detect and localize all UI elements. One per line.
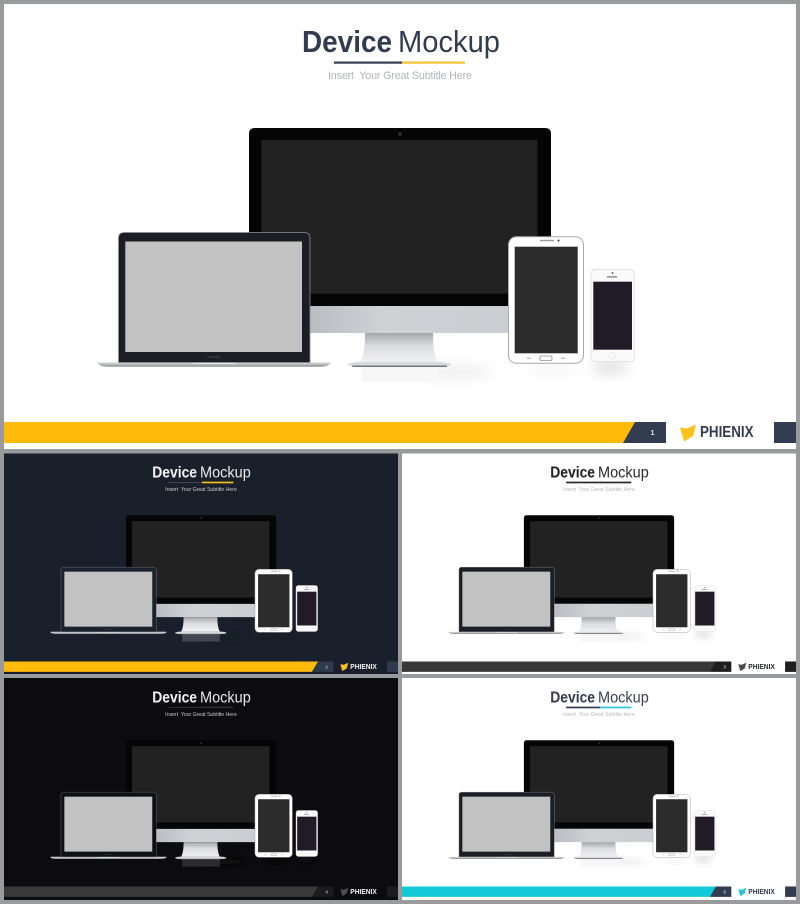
slide number: 3 — [723, 664, 726, 669]
icon: Phienix logo — [738, 663, 746, 671]
phone — [591, 269, 634, 374]
charcoal slide contents — [402, 464, 796, 672]
laptop — [97, 232, 331, 367]
navy slide contents — [4, 464, 398, 672]
brand name: PHIENIX — [350, 887, 378, 896]
title: Device — [152, 464, 197, 481]
subtitle: Insert Your Great Subtitle Here — [563, 712, 635, 718]
device group — [50, 740, 318, 867]
slide number: 5 — [723, 889, 726, 894]
title underline — [566, 482, 631, 483]
subtitle: Insert Your Great Subtitle Here — [165, 487, 237, 493]
title underline — [168, 482, 233, 483]
title: Device — [302, 24, 392, 59]
panel: main white slide — [4, 4, 796, 449]
icon: Phienix logo — [680, 424, 696, 442]
title: Device — [550, 689, 595, 706]
title: Mockup — [598, 464, 649, 481]
footer bar — [4, 661, 398, 672]
title — [302, 24, 500, 59]
title: Mockup — [200, 464, 251, 481]
black slide contents — [4, 689, 398, 897]
icon: Phienix logo — [340, 888, 348, 896]
brand name: PHIENIX — [700, 424, 754, 441]
title: Mockup — [398, 24, 500, 59]
title — [550, 464, 649, 481]
monitor — [249, 128, 551, 382]
slide number: 1 — [651, 430, 655, 437]
slide number: 2 — [325, 664, 328, 669]
title underline — [334, 62, 465, 64]
teal slide contents — [402, 689, 796, 897]
slide number: 4 — [325, 889, 328, 894]
title: Device — [550, 464, 595, 481]
title: Mockup — [200, 689, 251, 706]
subtitle: Insert Your Great Subtitle Here — [563, 487, 635, 493]
subtitle: Insert Your Great Subtitle Here — [328, 70, 472, 82]
panel: navy slide — [4, 454, 398, 674]
panel: white slide with charcoal bar — [402, 454, 796, 674]
device group — [50, 515, 318, 642]
brand name: PHIENIX — [748, 662, 776, 671]
icon: Phienix logo — [340, 663, 348, 671]
title underline — [168, 707, 233, 708]
device group — [97, 128, 634, 382]
brand name: PHIENIX — [350, 662, 378, 671]
title — [152, 464, 251, 481]
subtitle: Insert Your Great Subtitle Here — [165, 712, 237, 718]
title — [152, 689, 251, 706]
footer bar — [4, 886, 398, 897]
title: Mockup — [598, 689, 649, 706]
title underline — [566, 707, 631, 708]
tablet — [508, 237, 584, 374]
device group — [448, 740, 716, 867]
panel: white slide with teal bar — [402, 678, 796, 900]
footer bar — [402, 661, 796, 672]
title — [550, 689, 649, 706]
icon: Phienix logo — [738, 888, 746, 896]
brand name: PHIENIX — [748, 887, 776, 896]
device group — [448, 515, 716, 642]
footer bar — [402, 886, 796, 897]
title: Device — [152, 689, 197, 706]
panel: black slide — [4, 678, 398, 900]
footer bar — [4, 422, 796, 443]
